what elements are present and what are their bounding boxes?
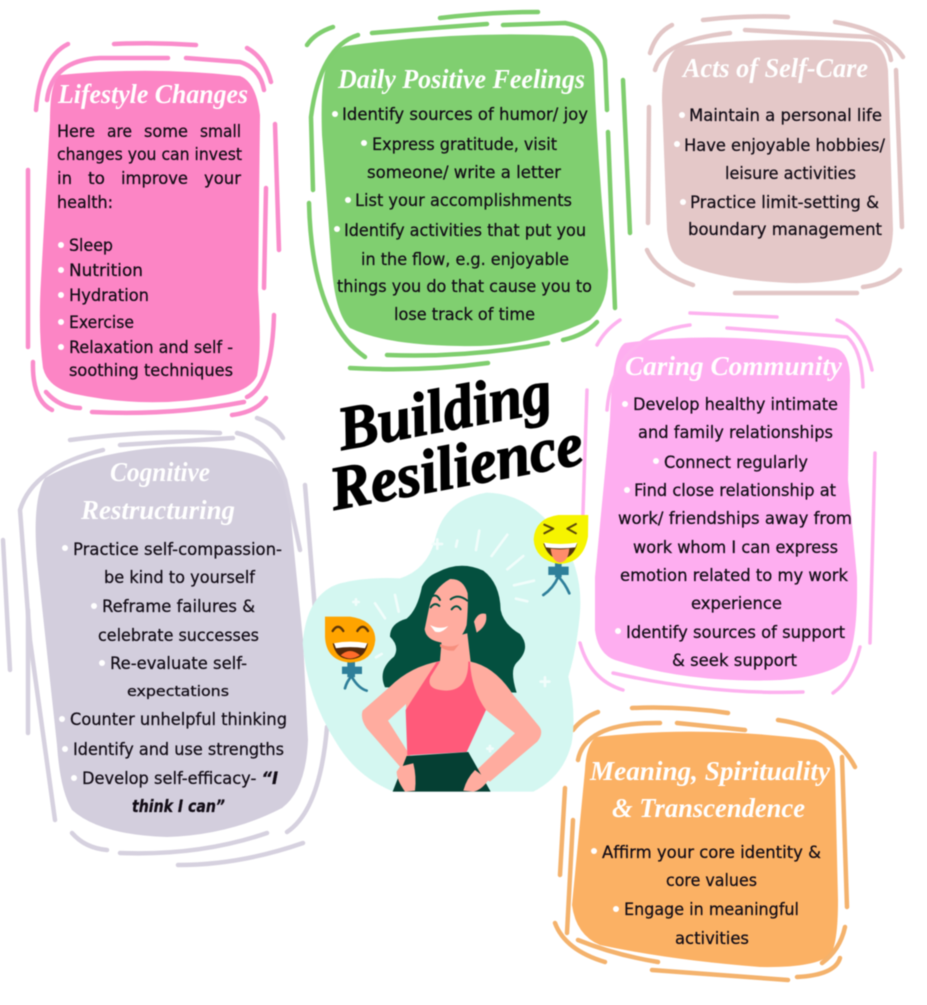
- bullet list: boundary management: [688, 220, 882, 240]
- bullet list: Counter unhelpful thinking: [70, 710, 287, 730]
- ear: [474, 614, 486, 633]
- intro text: Here: [57, 122, 95, 142]
- heading: [589, 756, 831, 823]
- orange blob: [572, 732, 838, 967]
- pink blob: [40, 71, 260, 402]
- bullet list: celebrate successes: [98, 626, 259, 646]
- bullet list: Reframe failures &: [102, 597, 255, 617]
- panel: Daily Positive Feelings: [307, 12, 630, 369]
- main title: Building: [331, 358, 557, 464]
- bullet list: be kind to yourself: [104, 568, 256, 588]
- light pink brush frame: [580, 313, 875, 693]
- bullet list: someone/ write a letter: [367, 163, 561, 183]
- bullet list: [332, 105, 592, 325]
- orange brush frame: [555, 708, 855, 980]
- sparkle lines: [353, 531, 549, 751]
- bullet list: Maintain a personal life: [689, 106, 882, 126]
- bullet list: in the flow, e.g. enjoyable: [361, 250, 569, 270]
- mint background blob: [303, 493, 580, 792]
- intro text: small: [200, 122, 241, 142]
- bullet list: work/ friendships away from: [618, 509, 852, 529]
- heading: Meaning, Spirituality: [589, 756, 831, 786]
- heading: [80, 457, 235, 525]
- hands: [397, 763, 416, 792]
- pink top: [406, 662, 486, 755]
- bullet list: Practice limit-setting &: [690, 193, 879, 213]
- intro text: [57, 122, 242, 213]
- lavender brush frame: [3, 418, 327, 865]
- bullet list: Hydration: [69, 286, 149, 306]
- bullet list: lose track of time: [394, 305, 535, 325]
- green brush frame: [307, 12, 630, 369]
- bullet list: activities: [675, 929, 749, 949]
- intro text: some: [144, 122, 188, 142]
- intro text: are: [107, 122, 132, 142]
- heading: Caring Community: [625, 351, 843, 381]
- bullet list: Connect regularly: [664, 453, 808, 473]
- bullet list: [59, 540, 287, 817]
- bullet list: soothing techniques: [69, 361, 233, 381]
- dusty pink brush frame: [647, 16, 903, 293]
- bullet list: core values: [666, 871, 757, 891]
- panel: Acts of Self-Care: [647, 16, 903, 293]
- illustration: woman with emojis: [303, 493, 588, 792]
- bullet list: and family relationships: [638, 423, 833, 443]
- bullet list: Have enjoyable hobbies/: [684, 136, 885, 156]
- bullet list: Express gratitude, visit: [372, 135, 557, 155]
- neck shadow: [440, 644, 459, 651]
- pink brush frame: [28, 43, 279, 415]
- bullet list: [615, 395, 852, 671]
- bullet list: Develop healthy intimate: [633, 395, 838, 415]
- dusty pink blob: [662, 40, 893, 283]
- bullet list: Identify sources of support: [626, 623, 845, 643]
- bullet list: Develop self-efficacy- “I: [82, 769, 278, 789]
- intro text: changes you can invest: [57, 145, 242, 165]
- bullet list: experience: [691, 594, 782, 614]
- intro text: your: [204, 169, 241, 189]
- heading: Daily Positive Feelings: [337, 64, 585, 94]
- intro text: to: [88, 169, 105, 189]
- bullet list: Sleep: [69, 236, 113, 256]
- bullet list: emotion related to my work: [620, 566, 848, 586]
- main title: [323, 358, 588, 524]
- heading: Restructuring: [80, 495, 235, 525]
- bullet list: [58, 236, 233, 381]
- smile: [430, 625, 448, 632]
- eyes: [431, 596, 467, 609]
- bullet list: think I can”: [132, 797, 225, 817]
- intro text: in: [57, 169, 72, 189]
- bullet list: Nutrition: [69, 261, 143, 281]
- bullet list: Re-evaluate self-: [110, 654, 247, 674]
- panel: Cognitive Restructuring: [3, 418, 327, 865]
- bullet list: leisure activities: [725, 164, 856, 184]
- bullet list: & seek support: [672, 651, 797, 671]
- face: [425, 579, 468, 643]
- heading: Lifestyle Changes: [57, 79, 248, 109]
- main title: Resilience: [323, 410, 588, 524]
- bullet list: [591, 843, 821, 949]
- bullet list: Practice self-compassion-: [73, 540, 282, 560]
- bullet list: Identify activities that put you: [344, 221, 586, 241]
- bullet list: expectations: [127, 684, 229, 700]
- bullet list: things you do that cause you to: [337, 277, 592, 297]
- heading: Acts of Self-Care: [681, 53, 868, 83]
- light pink blob: [595, 338, 857, 681]
- panel: Caring Community: [580, 313, 875, 693]
- bullet list: Find close relationship at: [634, 481, 836, 501]
- panel: Lifestyle Changes: [28, 43, 279, 415]
- hair: [383, 566, 525, 693]
- bullet list: Identify and use strengths: [73, 740, 284, 760]
- intro text: health:: [57, 193, 113, 213]
- emoji: laughing orange: [325, 617, 375, 691]
- lavender blob: [36, 447, 308, 837]
- heading: & Transcendence: [612, 793, 805, 823]
- intro text: improve: [121, 169, 188, 189]
- panel: Meaning, Spirituality & Transcendence: [555, 708, 855, 980]
- bullet list: Identify sources of humor/ joy: [342, 105, 588, 125]
- bullet list: Engage in meaningful: [624, 900, 799, 920]
- bullet list: Exercise: [69, 313, 134, 333]
- bullet list: Relaxation and self -: [69, 338, 233, 358]
- bullet list: Affirm your core identity &: [602, 843, 821, 863]
- bullet list: [674, 106, 885, 240]
- emoji: playful yellow: [534, 515, 588, 595]
- bullet list: work whom I can express: [633, 538, 838, 558]
- bullet list: List your accomplishments: [355, 191, 572, 211]
- green blob: [322, 34, 608, 346]
- skirt: [393, 752, 491, 792]
- arms and torso skin: [362, 633, 541, 782]
- heading: Cognitive: [110, 457, 210, 487]
